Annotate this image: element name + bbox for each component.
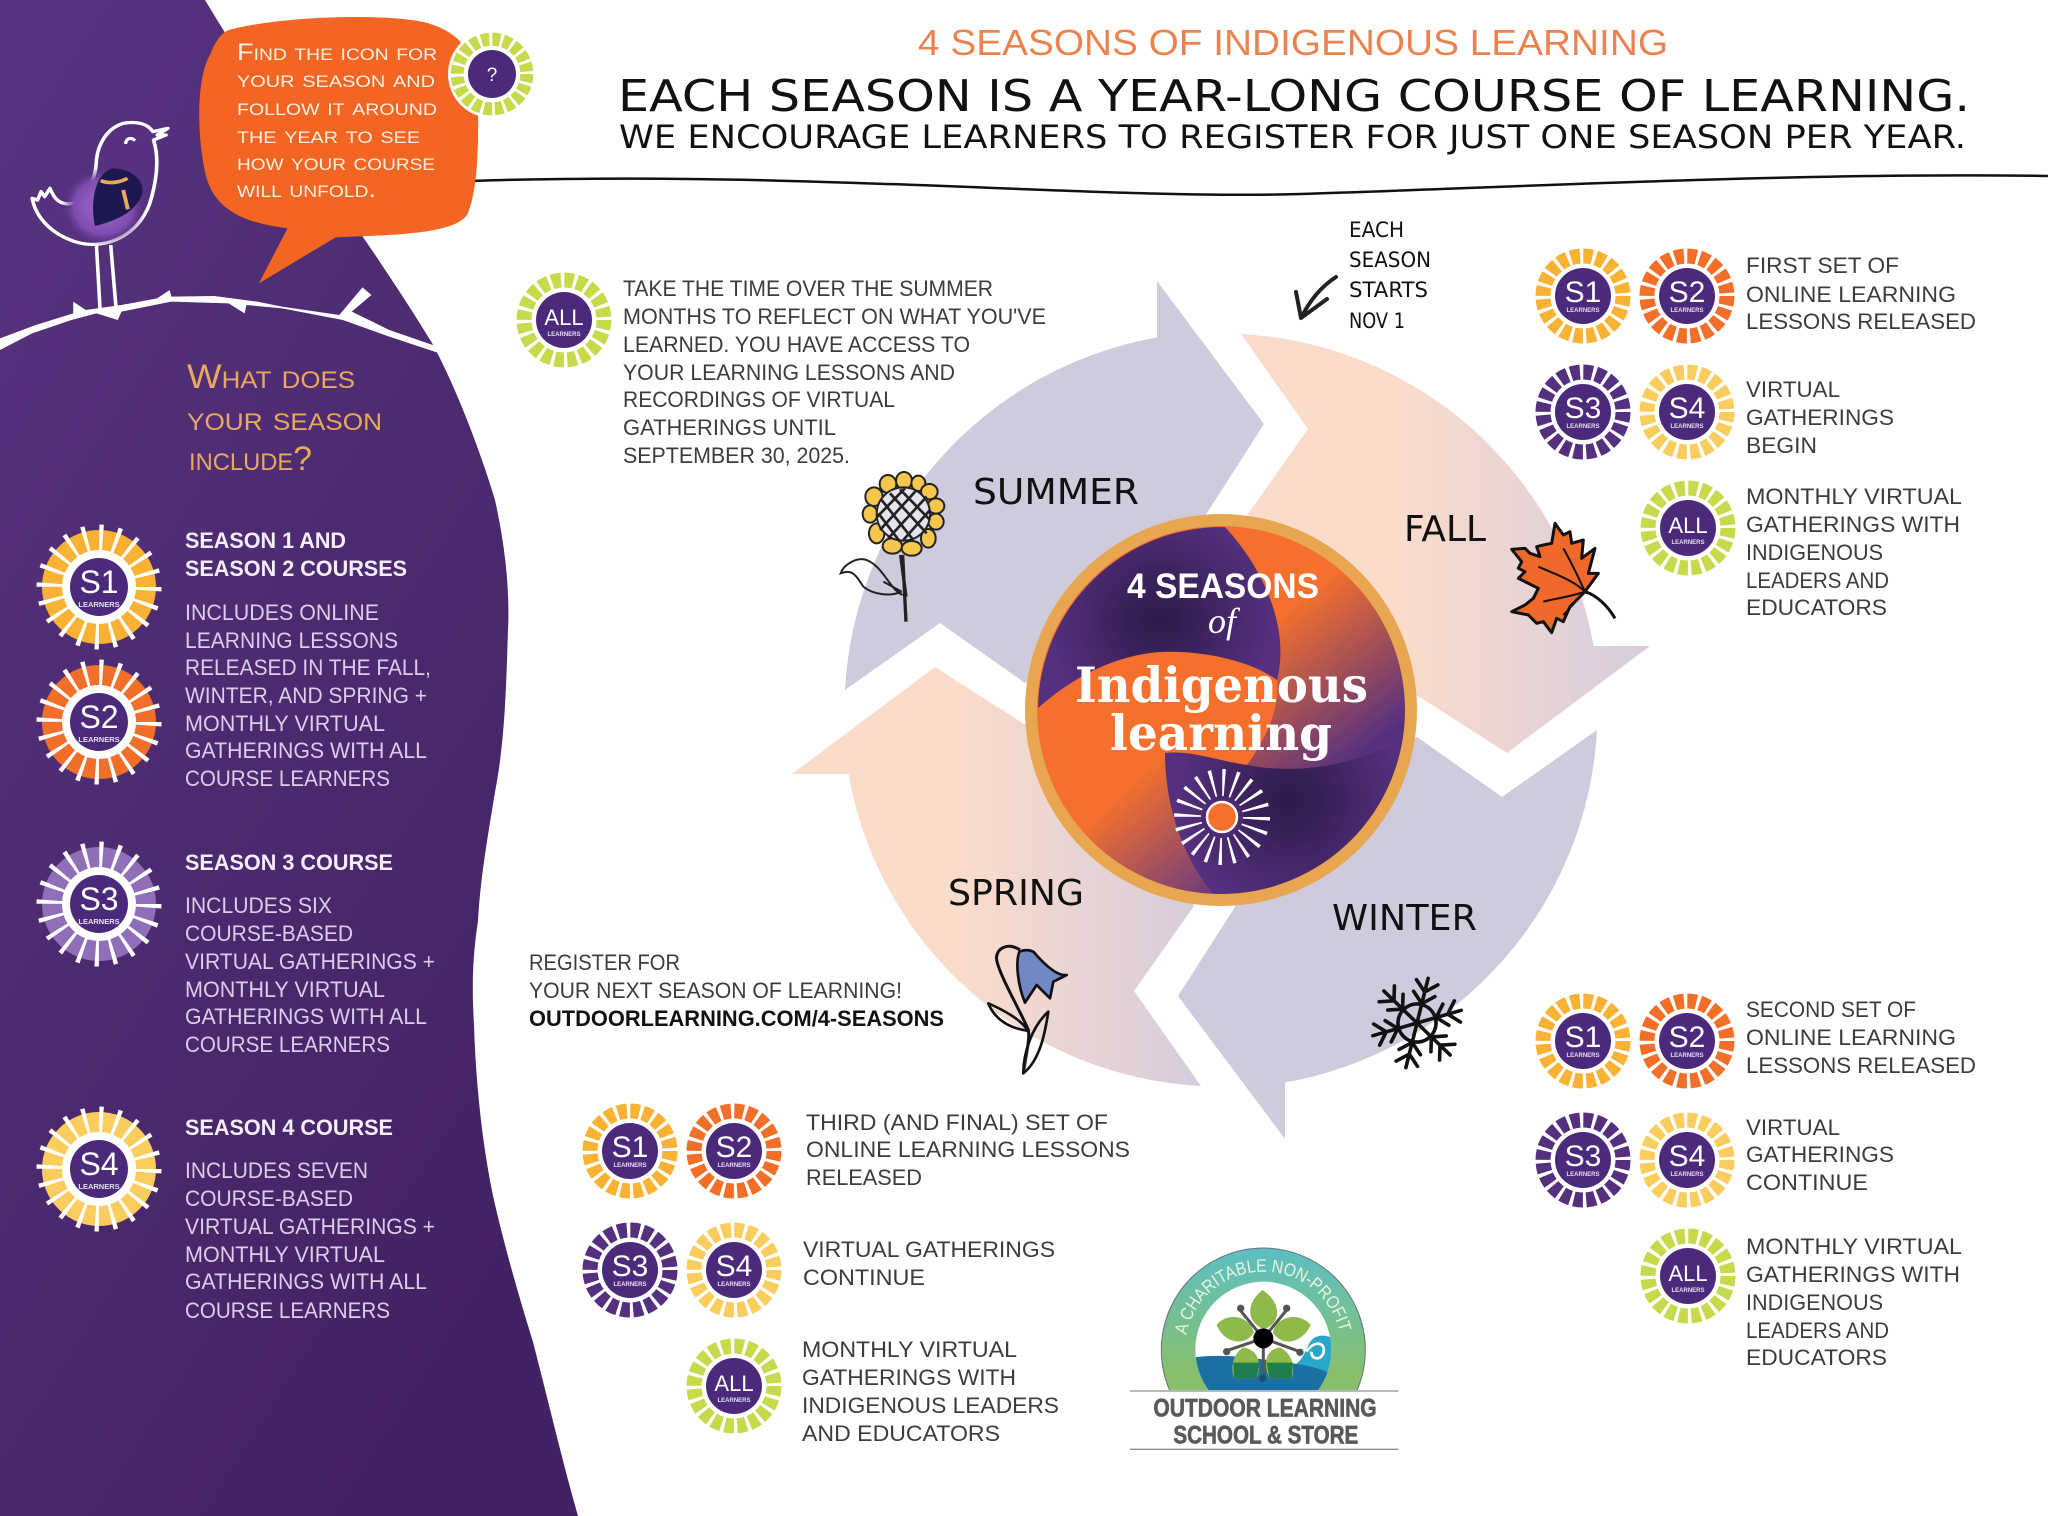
spring text: GATHERINGS WITH bbox=[802, 1365, 1016, 1390]
bubble text: the year to see bbox=[237, 122, 420, 149]
badge: S4: S4 bbox=[1669, 1140, 1705, 1173]
spring text: RELEASED bbox=[806, 1165, 922, 1190]
title: subheading: WE ENCOURAGE LEARNERS TO REGISTER FOR JUST ONE SEASON PER YEAR. bbox=[619, 118, 1966, 156]
sidebar text: season 3: COURSE LEARNERS bbox=[185, 1032, 390, 1057]
badge: S4: LEARNERS bbox=[1670, 424, 1704, 430]
sidebar text: seasons 1 and 2: MONTHLY VIRTUAL bbox=[185, 711, 385, 736]
sidebar badge: S1: S1 bbox=[79, 564, 119, 600]
fall text: LESSONS RELEASED bbox=[1746, 309, 1976, 334]
badge: all learners (summer): ALL bbox=[544, 305, 584, 330]
icon: snowflake bbox=[1362, 967, 1472, 1079]
fall text: GATHERINGS WITH bbox=[1746, 512, 1960, 537]
sidebar text: season 4 bbox=[185, 1115, 435, 1323]
note: each season starts: EACH bbox=[1349, 218, 1404, 242]
spring text: CONTINUE bbox=[803, 1265, 925, 1290]
bubble text: follow it around bbox=[237, 94, 437, 121]
text: summer reflection: TAKE THE TIME OVER THE SUMMER bbox=[623, 276, 993, 301]
sidebar badge: S3: LEARNERS bbox=[78, 917, 120, 926]
center medallion: Indigenous bbox=[1075, 656, 1368, 714]
bird eye bbox=[126, 138, 135, 144]
sidebar badge: S3 bbox=[50, 855, 148, 953]
winter text: ONLINE LEARNING bbox=[1746, 1025, 1956, 1050]
note: each season starts: SEASON bbox=[1349, 248, 1431, 272]
arrow: winter bbox=[1178, 730, 1597, 1139]
fall text: LEADERS AND bbox=[1746, 568, 1889, 593]
spring text: THIRD (AND FINAL) SET OF bbox=[806, 1110, 1108, 1135]
sidebar badge: S3: S3 bbox=[79, 881, 119, 917]
badge: S1: LEARNERS bbox=[1566, 1053, 1600, 1059]
sidebar badge: S1: LEARNERS bbox=[78, 600, 120, 609]
badge: S4: LEARNERS bbox=[1670, 1172, 1704, 1178]
spring text: INDIGENOUS LEADERS bbox=[802, 1393, 1059, 1418]
sidebar text: season 3: COURSE-BASED bbox=[185, 921, 353, 946]
fall text: BEGIN bbox=[1746, 433, 1817, 458]
badge: S3: S3 bbox=[1565, 392, 1601, 425]
text: register call to action: REGISTER FOR bbox=[529, 950, 680, 975]
bird legs bbox=[96, 245, 116, 308]
badge: S2: LEARNERS bbox=[1670, 1053, 1704, 1059]
spring text: VIRTUAL GATHERINGS bbox=[803, 1237, 1055, 1262]
sidebar question: What does bbox=[187, 358, 355, 396]
center medallion bbox=[1025, 514, 1417, 906]
sidebar question: include? bbox=[189, 440, 312, 478]
icon: question badge: ? bbox=[487, 65, 497, 86]
winter text: SECOND SET OF bbox=[1746, 997, 1916, 1022]
fall text: INDIGENOUS bbox=[1746, 540, 1883, 565]
badge: S2: LEARNERS bbox=[1670, 308, 1704, 314]
icon: maple leaf bbox=[1512, 523, 1615, 633]
spring text: ONLINE LEARNING LESSONS bbox=[806, 1137, 1130, 1162]
badge: S1 bbox=[1543, 256, 1623, 336]
title block bbox=[618, 22, 1970, 156]
badge: S4: LEARNERS bbox=[717, 1282, 751, 1288]
badge: S2 bbox=[1647, 256, 1727, 336]
icon: bluebell bbox=[988, 946, 1067, 1073]
badge: ALL: ALL bbox=[1668, 1261, 1708, 1286]
note: each season starts: STARTS bbox=[1349, 278, 1428, 302]
logo arch bbox=[1160, 1248, 1366, 1390]
sidebar badge: S4: S4 bbox=[79, 1146, 119, 1182]
sidebar text: seasons 1 and 2: WINTER, AND SPRING + bbox=[185, 683, 427, 708]
icon: sunflower bbox=[841, 472, 944, 622]
sidebar text: season 3: VIRTUAL GATHERINGS + bbox=[185, 949, 435, 974]
badge: all learners (summer): LEARNERS bbox=[547, 332, 581, 338]
bubble text: how your course bbox=[237, 149, 435, 176]
sidebar text: season 3: GATHERINGS WITH ALL bbox=[185, 1004, 427, 1029]
badge: S2: S2 bbox=[1669, 1021, 1705, 1054]
text: summer reflection bbox=[623, 276, 1046, 468]
fall text: ONLINE LEARNING bbox=[1746, 282, 1956, 307]
winter text: INDIGENOUS bbox=[1746, 1290, 1883, 1315]
badge: S3: S3 bbox=[612, 1250, 648, 1283]
sidebar text: season 3: MONTHLY VIRTUAL bbox=[185, 977, 385, 1002]
sidebar text: season 4: COURSE LEARNERS bbox=[185, 1298, 390, 1323]
sidebar badge: S4: LEARNERS bbox=[78, 1182, 120, 1191]
badge: ALL: ALL bbox=[714, 1371, 754, 1396]
sidebar text: season 4: MONTHLY VIRTUAL bbox=[185, 1242, 385, 1267]
sidebar question: your season bbox=[187, 400, 382, 438]
arrow: season start pointer bbox=[1296, 277, 1336, 318]
branch bbox=[0, 287, 437, 353]
logo: Outdoor Learning School and Store: A CHARITABLE NON-PROFIT bbox=[1175, 1259, 1352, 1336]
badge: ALL bbox=[1648, 488, 1728, 568]
sidebar text: season 4: VIRTUAL GATHERINGS + bbox=[185, 1214, 435, 1239]
title: overline: 4 SEASONS OF INDIGENOUS LEARNING bbox=[918, 22, 1668, 63]
badge: S3 bbox=[1543, 1120, 1623, 1200]
logo: Outdoor Learning School and Store bbox=[1130, 1248, 1398, 1450]
badge: S4: S4 bbox=[716, 1250, 752, 1283]
logo: Outdoor Learning School and Store: SCHOOL & STORE bbox=[1173, 1421, 1358, 1449]
badge: S1 bbox=[590, 1111, 670, 1191]
badge: S2: S2 bbox=[716, 1131, 752, 1164]
bubble text: will unfold. bbox=[237, 176, 376, 203]
bubble text bbox=[237, 39, 437, 203]
badge: S1: LEARNERS bbox=[613, 1163, 647, 1169]
center medallion: learning bbox=[1110, 704, 1332, 762]
header divider line bbox=[470, 175, 2048, 195]
sidebar text: seasons 1 and 2: COURSE LEARNERS bbox=[185, 766, 390, 791]
logo flower bbox=[1217, 1290, 1311, 1378]
sidebar text: seasons 1 and 2 bbox=[185, 528, 431, 791]
sidebar text: season 3: INCLUDES SIX bbox=[185, 893, 332, 918]
note: each season starts bbox=[1349, 218, 1431, 333]
badge: S1: S1 bbox=[1565, 276, 1601, 309]
badge: S3: LEARNERS bbox=[1566, 424, 1600, 430]
text: register call to action: YOUR NEXT SEASON OF LEARNING! bbox=[529, 978, 902, 1003]
bird wing bbox=[93, 168, 142, 226]
text: summer reflection: SEPTEMBER 30, 2025. bbox=[623, 443, 850, 468]
text: summer reflection: MONTHS TO REFLECT ON WHAT YOU'VE bbox=[623, 304, 1046, 329]
badge: S3: LEARNERS bbox=[613, 1282, 647, 1288]
spring text: MONTHLY VIRTUAL bbox=[802, 1337, 1017, 1362]
sidebar text: seasons 1 and 2: INCLUDES ONLINE bbox=[185, 600, 379, 625]
badge: S1 bbox=[1543, 1001, 1623, 1081]
center medallion: of bbox=[1208, 601, 1241, 641]
bird body bbox=[32, 123, 168, 244]
bird on branch illustration bbox=[0, 123, 437, 353]
logo waves bbox=[1196, 1336, 1332, 1390]
logo wordmark: OUTDOOR LEARNING bbox=[1153, 1395, 1377, 1423]
text: register call to action bbox=[529, 950, 944, 1031]
fall text bbox=[1746, 253, 1976, 620]
badge: S3: LEARNERS bbox=[1566, 1172, 1600, 1178]
sidebar text: season 4: INCLUDES SEVEN bbox=[185, 1158, 368, 1183]
badge: S4 bbox=[1647, 1120, 1727, 1200]
sidebar text: seasons 1 and 2: RELEASED IN THE FALL, bbox=[185, 655, 431, 680]
sidebar badge: S2 bbox=[50, 673, 148, 771]
note: each season starts: NOV 1 bbox=[1349, 309, 1405, 333]
fall text: VIRTUAL bbox=[1746, 377, 1840, 402]
sidebar text: season 4: GATHERINGS WITH ALL bbox=[185, 1269, 427, 1294]
winter text: CONTINUE bbox=[1746, 1170, 1868, 1195]
badge: ALL bbox=[694, 1346, 774, 1426]
winter text bbox=[1746, 997, 1976, 1370]
sidebar badge: S4 bbox=[50, 1120, 148, 1218]
text: summer reflection: YOUR LEARNING LESSONS AND bbox=[623, 360, 955, 385]
sidebar text: season 3 bbox=[185, 850, 435, 1057]
season label: summer: SUMMER bbox=[973, 472, 1139, 513]
bubble text: your season and bbox=[237, 66, 435, 93]
winter text: MONTHLY VIRTUAL bbox=[1746, 1234, 1962, 1259]
badge: S4: S4 bbox=[1669, 392, 1705, 425]
winter text: EDUCATORS bbox=[1746, 1345, 1887, 1370]
sidebar badge: S1 bbox=[50, 538, 148, 636]
badge: ALL: LEARNERS bbox=[1671, 540, 1705, 546]
bubble text: Find the icon for bbox=[237, 39, 437, 66]
arrow: spring bbox=[792, 667, 1201, 1086]
fall badges bbox=[1543, 256, 1728, 568]
sidebar text: seasons 1 and 2: LEARNING LESSONS bbox=[185, 628, 398, 653]
text: summer reflection: RECORDINGS OF VIRTUAL bbox=[623, 387, 895, 412]
text: summer reflection: LEARNED. YOU HAVE ACCESS TO bbox=[623, 332, 970, 357]
medallion text: 4 SEASONS bbox=[1127, 567, 1319, 606]
winter text: LESSONS RELEASED bbox=[1746, 1053, 1976, 1078]
badge: S2 bbox=[694, 1111, 774, 1191]
fall text: GATHERINGS bbox=[1746, 405, 1894, 430]
badge: S2: S2 bbox=[1669, 276, 1705, 309]
spring badges bbox=[590, 1111, 774, 1426]
season label: winter: WINTER bbox=[1332, 898, 1477, 939]
badge: S1: S1 bbox=[612, 1131, 648, 1164]
speech bubble bbox=[199, 17, 478, 283]
arrow: summer bbox=[845, 281, 1264, 690]
sidebar text: season 4: COURSE-BASED bbox=[185, 1186, 353, 1211]
fall text: EDUCATORS bbox=[1746, 595, 1887, 620]
fall text: FIRST SET OF bbox=[1746, 253, 1899, 278]
badge: all learners (summer) bbox=[524, 280, 604, 360]
title: main heading: EACH SEASON IS A YEAR-LONG COURSE OF LEARNING. bbox=[618, 71, 1970, 122]
bird glow bbox=[61, 167, 146, 246]
badge: S4 bbox=[1647, 372, 1727, 452]
text: summer reflection: GATHERINGS UNTIL bbox=[623, 415, 836, 440]
winter text: GATHERINGS WITH bbox=[1746, 1262, 1960, 1287]
spring text: AND EDUCATORS bbox=[802, 1421, 1000, 1446]
winter text: LEADERS AND bbox=[1746, 1318, 1889, 1343]
winter text: VIRTUAL bbox=[1746, 1115, 1840, 1140]
badge: S1: S1 bbox=[1565, 1021, 1601, 1054]
spring text bbox=[802, 1110, 1130, 1446]
badge: ALL: LEARNERS bbox=[717, 1398, 751, 1404]
sidebar badge: S2: S2 bbox=[79, 699, 119, 735]
badge: S3 bbox=[590, 1230, 670, 1310]
badge: ALL: ALL bbox=[1668, 513, 1708, 538]
icon: sun bbox=[1188, 783, 1256, 851]
badge: S4 bbox=[694, 1230, 774, 1310]
season label: spring: SPRING bbox=[948, 873, 1084, 914]
sidebar text: season 3: SEASON 3 COURSE bbox=[185, 850, 393, 875]
sidebar text: seasons 1 and 2: SEASON 1 AND bbox=[185, 528, 346, 553]
badge: S1: LEARNERS bbox=[1566, 308, 1600, 314]
badge: S3 bbox=[1543, 372, 1623, 452]
text: register call to action: OUTDOORLEARNING.COM/4-SEASONS bbox=[529, 1006, 944, 1031]
sidebar badge: S2: LEARNERS bbox=[78, 735, 120, 744]
winter text: GATHERINGS bbox=[1746, 1142, 1894, 1167]
season label: fall: FALL bbox=[1404, 509, 1486, 550]
logo divider rules bbox=[1130, 1391, 1398, 1449]
arrow: fall bbox=[1241, 334, 1650, 753]
badge: S3: S3 bbox=[1565, 1140, 1601, 1173]
badge: S2 bbox=[1647, 1001, 1727, 1081]
badge: ALL bbox=[1648, 1236, 1728, 1316]
sidebar text: seasons 1 and 2: GATHERINGS WITH ALL bbox=[185, 738, 427, 763]
fall text: MONTHLY VIRTUAL bbox=[1746, 484, 1962, 509]
logo arc text bbox=[1185, 1272, 1342, 1350]
sidebar question bbox=[187, 358, 382, 478]
sidebar text: season 4: SEASON 4 COURSE bbox=[185, 1115, 393, 1140]
badge: ALL: LEARNERS bbox=[1671, 1288, 1705, 1294]
badge: S2: LEARNERS bbox=[717, 1163, 751, 1169]
icon: question badge bbox=[448, 30, 536, 118]
winter badges bbox=[1543, 1001, 1728, 1316]
sidebar text: seasons 1 and 2: SEASON 2 COURSES bbox=[185, 556, 407, 581]
panel: purple sidebar bbox=[0, 0, 578, 1516]
